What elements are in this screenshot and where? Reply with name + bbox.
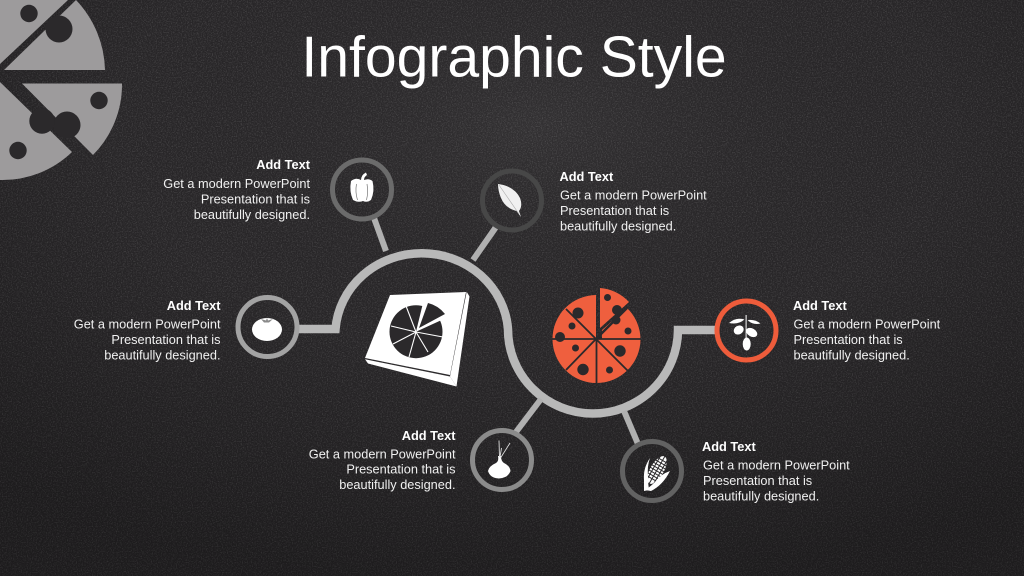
pizza body bbox=[552, 295, 640, 383]
text block: olive bbox=[793, 298, 941, 362]
node: onion bbox=[472, 430, 532, 490]
pizza box bbox=[365, 292, 470, 386]
text block: tomato: Get a modern PowerPoint bbox=[74, 316, 221, 332]
toppings bbox=[555, 294, 632, 375]
spoke: corn bbox=[624, 411, 638, 444]
text block: leaf: Add Text bbox=[560, 169, 614, 184]
icon: corn bbox=[643, 453, 671, 491]
text block: tomato bbox=[74, 298, 221, 362]
text block: olive: Get a modern PowerPoint bbox=[794, 316, 941, 332]
text block: corn: beautifully designed. bbox=[703, 488, 819, 504]
box lid bbox=[365, 292, 466, 375]
text block: leaf: beautifully designed. bbox=[560, 218, 676, 234]
title: Infographic Style bbox=[301, 26, 727, 90]
text block: pepper: Add Text bbox=[256, 157, 311, 172]
text block: olive: Add Text bbox=[793, 298, 848, 313]
node: corn bbox=[622, 442, 682, 500]
spoke: pepper bbox=[374, 218, 386, 251]
text block: corn: Presentation that is bbox=[703, 473, 812, 488]
text block: corn: Add Text bbox=[702, 439, 757, 454]
spoke: onion bbox=[516, 399, 541, 432]
text block: onion: Presentation that is bbox=[346, 462, 456, 476]
icon: olive branch bbox=[729, 315, 760, 350]
curved connector line bbox=[298, 253, 718, 414]
text block: onion bbox=[309, 428, 456, 492]
text block: pepper: Presentation that is bbox=[201, 192, 310, 206]
text block: tomato: Add Text bbox=[167, 298, 221, 313]
lifted slice bbox=[600, 288, 629, 328]
box sides bbox=[450, 292, 470, 386]
text block: pepper: Get a modern PowerPoint bbox=[163, 176, 310, 191]
text block: corn: Get a modern PowerPoint bbox=[703, 458, 850, 472]
text block: leaf bbox=[560, 169, 707, 234]
icon: pepper bbox=[350, 172, 373, 202]
text block: corn bbox=[702, 439, 850, 504]
text block: tomato: beautifully designed. bbox=[104, 348, 220, 362]
node: tomato bbox=[238, 298, 297, 356]
slice cuts bbox=[552, 308, 641, 385]
red pizza bbox=[552, 288, 641, 385]
decorative grey pizza slices, top left bbox=[0, 0, 122, 180]
text block: pepper: beautifully designed. bbox=[194, 207, 310, 222]
text block: olive: Presentation that is bbox=[794, 332, 903, 347]
text block: onion: beautifully designed. bbox=[339, 477, 456, 492]
text block: pepper bbox=[163, 157, 311, 222]
text block: tomato: Presentation that is bbox=[111, 332, 220, 347]
icon: leaf bbox=[498, 184, 521, 217]
node: olive bbox=[717, 301, 776, 360]
node: pepper bbox=[332, 160, 392, 219]
pizza on lid bbox=[390, 303, 446, 358]
text block: leaf: Get a modern PowerPoint bbox=[560, 188, 707, 202]
text block: onion: Add Text bbox=[402, 428, 456, 443]
text block: leaf: Presentation that is bbox=[560, 203, 669, 218]
text block: onion: Get a modern PowerPoint bbox=[309, 446, 456, 462]
text block: olive: beautifully designed. bbox=[794, 348, 910, 362]
icon: onion bbox=[488, 440, 510, 478]
spoke: leaf bbox=[473, 227, 496, 260]
icon: tomato bbox=[252, 318, 282, 341]
node: leaf bbox=[482, 171, 542, 230]
